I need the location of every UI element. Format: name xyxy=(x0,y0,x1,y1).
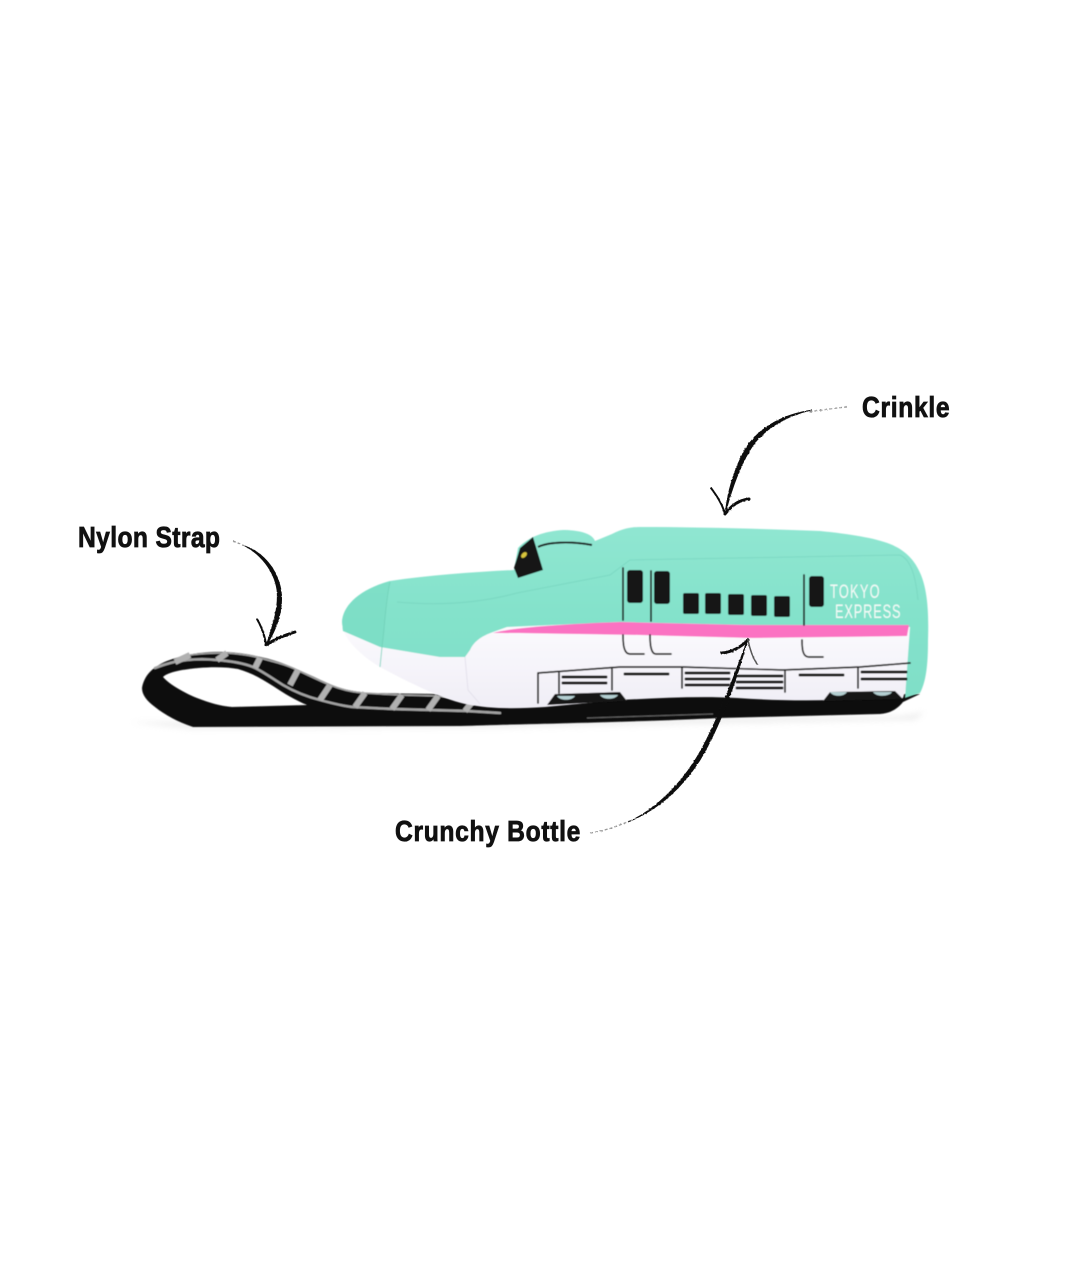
train plush xyxy=(342,527,928,708)
train teal upper body xyxy=(342,527,928,698)
lower vents xyxy=(563,672,906,688)
white side panel shadow xyxy=(465,657,480,704)
train logo text: EXPRESS xyxy=(835,602,901,623)
train logo text xyxy=(830,582,901,623)
upper windows xyxy=(627,570,824,617)
bogies and wheels xyxy=(547,691,903,705)
arrow: Crunchy Bottle xyxy=(590,638,757,833)
label: Nylon Strap: Nylon Strap xyxy=(78,521,220,553)
train logo text: TOKYO xyxy=(830,582,880,603)
label: Crunchy Bottle: Crunchy Bottle xyxy=(395,815,580,847)
front seam xyxy=(380,582,390,667)
pink stripe xyxy=(493,622,909,638)
cab window xyxy=(514,537,592,578)
nose shading xyxy=(342,581,390,647)
strap highlight edge xyxy=(587,714,713,718)
label: Crinkle: Crinkle xyxy=(862,391,950,423)
arrow: Crinkle xyxy=(711,407,847,515)
train white lower body xyxy=(342,620,914,708)
nylon strap xyxy=(142,652,920,727)
arrow: Nylon Strap xyxy=(233,541,295,646)
ground shadow xyxy=(130,712,925,729)
strap loop xyxy=(142,652,920,727)
body stitching xyxy=(397,555,918,604)
strap grid pattern xyxy=(155,653,500,713)
door and panel lines xyxy=(538,568,910,703)
